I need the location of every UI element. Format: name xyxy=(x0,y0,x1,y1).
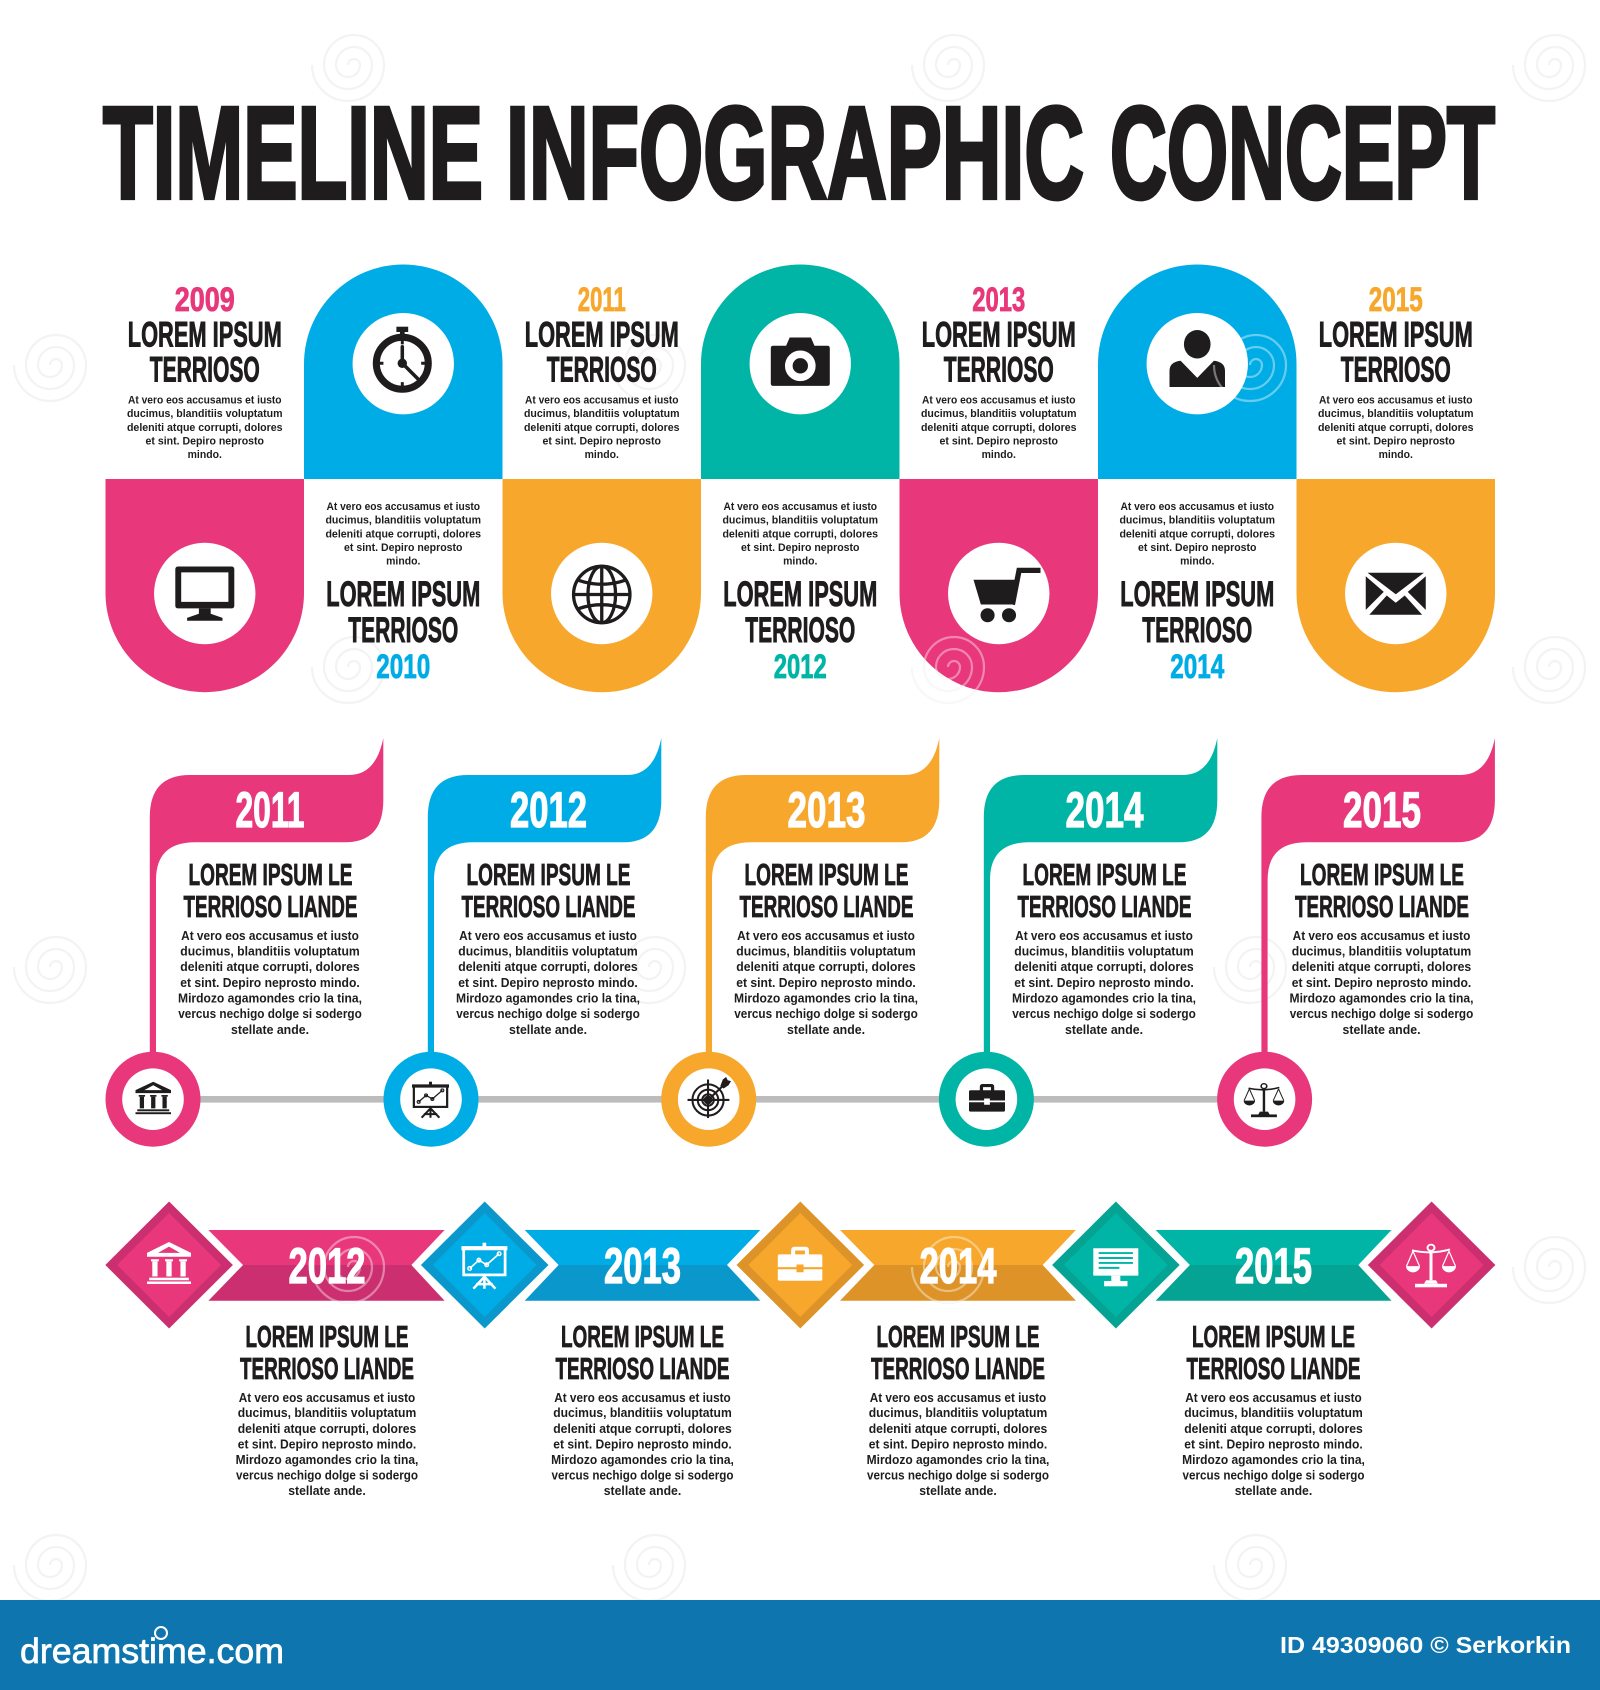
text 2011: et sint. Depiro neprosto xyxy=(543,436,661,448)
text block 2013: vercus nechigo dolge si sodergo xyxy=(552,1468,734,1482)
ribbon 2014 xyxy=(840,1230,1076,1301)
text 2010: ducimus, blanditiis voluptatum xyxy=(325,515,481,527)
ribbon 2013: 2013 xyxy=(604,1238,681,1294)
pill 2012 teal xyxy=(701,264,900,479)
ribbon 2015 xyxy=(1156,1230,1392,1301)
flag 2014: deleniti atque corrupti, dolores xyxy=(1014,959,1194,974)
panel: alternating pill timeline xyxy=(106,264,1495,692)
flag 2011: Mirdozo agamondes crio la tina, xyxy=(178,990,362,1006)
text 2012: et sint. Depiro neprosto xyxy=(741,542,860,554)
flag 2013: stellate ande. xyxy=(787,1022,865,1037)
text 2009: deleniti atque corrupti, dolores xyxy=(127,422,283,434)
flag 2012: ducimus, blanditiis voluptatum xyxy=(458,944,638,958)
text 2013: LOREM IPSUM xyxy=(922,316,1076,354)
text block 2015: LOREM IPSUM LE xyxy=(1192,1319,1355,1354)
text 2009: ducimus, blanditiis voluptatum xyxy=(127,408,283,420)
flag 2013 xyxy=(661,738,939,1147)
ribbon 2015: 2015 xyxy=(1235,1238,1312,1294)
flag 2015: deleniti atque corrupti, dolores xyxy=(1292,959,1471,974)
panel: flag timeline xyxy=(106,738,1495,1147)
text block 2013: At vero eos accusamus et iusto xyxy=(554,1390,731,1405)
pill 2013 pink xyxy=(900,479,1098,692)
text 2011: 2011 xyxy=(578,281,626,319)
connector line xyxy=(195,1096,1225,1103)
text 2013: At vero eos accusamus et iusto xyxy=(922,394,1076,406)
pill 2014 blue xyxy=(1098,264,1296,479)
flag 2014: LOREM IPSUM LE xyxy=(1022,857,1186,892)
text block 2012: ducimus, blanditiis voluptatum xyxy=(238,1405,416,1420)
text 2014: At vero eos accusamus et iusto xyxy=(1120,501,1274,513)
flag 2011: TERRIOSO LIANDE xyxy=(184,889,358,924)
text 2012: ducimus, blanditiis voluptatum xyxy=(722,515,878,527)
text 2015: deleniti atque corrupti, dolores xyxy=(1318,422,1474,434)
text block 2012: et sint. Depiro neprosto mindo. xyxy=(238,1436,416,1452)
text 2014: LOREM IPSUM xyxy=(1120,575,1274,614)
text block 2012: vercus nechigo dolge si sodergo xyxy=(236,1468,418,1482)
text 2011: LOREM IPSUM xyxy=(525,316,679,354)
text 2011: TERRIOSO xyxy=(547,350,657,390)
text 2013: et sint. Depiro neprosto xyxy=(940,436,1058,448)
flag 2013: LOREM IPSUM LE xyxy=(744,857,908,892)
text block 2014 xyxy=(867,1319,1049,1498)
text 2015: et sint. Depiro neprosto xyxy=(1337,436,1455,448)
text 2009: 2009 xyxy=(175,281,235,319)
flag 2011: LOREM IPSUM LE xyxy=(188,857,352,892)
pill 2015 orange xyxy=(1296,479,1495,692)
flag 2013: ducimus, blanditiis voluptatum xyxy=(736,944,916,958)
text block 2013: Mirdozo agamondes crio la tina, xyxy=(551,1452,734,1467)
text block 2013: stellate ande. xyxy=(604,1483,681,1498)
flag 2015: LOREM IPSUM LE xyxy=(1300,857,1464,892)
flag 2015 xyxy=(1217,738,1495,1147)
text block 2012: TERRIOSO LIANDE xyxy=(240,1351,414,1386)
text 2014: TERRIOSO xyxy=(1142,611,1252,650)
text block 2014: At vero eos accusamus et iusto xyxy=(870,1390,1046,1405)
flag 2015: Mirdozo agamondes crio la tina, xyxy=(1290,990,1474,1006)
flag 2014: TERRIOSO LIANDE xyxy=(1018,889,1192,924)
text block 2014: vercus nechigo dolge si sodergo xyxy=(867,1468,1049,1482)
flag 2011 xyxy=(106,738,383,1147)
flag 2014: stellate ande. xyxy=(1065,1022,1143,1037)
flag 2014 xyxy=(939,738,1217,1147)
text block 2015: Mirdozo agamondes crio la tina, xyxy=(1182,1452,1365,1467)
text 2010: TERRIOSO xyxy=(348,611,458,650)
text block 2015: stellate ande. xyxy=(1235,1483,1312,1498)
flag 2011: 2011 xyxy=(236,782,304,838)
text 2012 xyxy=(722,501,878,686)
text 2010: deleniti atque corrupti, dolores xyxy=(325,528,481,540)
flag 2013: TERRIOSO LIANDE xyxy=(740,889,914,924)
flag 2014: ducimus, blanditiis voluptatum xyxy=(1014,944,1194,958)
diamond: briefcase xyxy=(736,1202,864,1328)
text block 2014: TERRIOSO LIANDE xyxy=(871,1351,1045,1386)
text 2012: At vero eos accusamus et iusto xyxy=(723,501,877,513)
footer bar xyxy=(0,1600,1600,1690)
text 2014: deleniti atque corrupti, dolores xyxy=(1119,528,1275,540)
flag 2013: vercus nechigo dolge si sodergo xyxy=(734,1006,918,1021)
text 2014: et sint. Depiro neprosto xyxy=(1138,542,1257,554)
text block 2015: At vero eos accusamus et iusto xyxy=(1185,1390,1362,1405)
flag 2012: deleniti atque corrupti, dolores xyxy=(458,959,638,974)
text 2015: At vero eos accusamus et iusto xyxy=(1319,394,1473,406)
text 2013: 2013 xyxy=(972,281,1025,319)
text 2011: At vero eos accusamus et iusto xyxy=(525,394,679,406)
foreground watermark spirals xyxy=(312,335,1286,1303)
text 2011: mindo. xyxy=(585,449,619,461)
text 2012: mindo. xyxy=(783,556,817,568)
text 2013: ducimus, blanditiis voluptatum xyxy=(921,408,1077,420)
diamond: scales xyxy=(1368,1202,1495,1328)
pill 2010 blue xyxy=(304,264,502,479)
flag 2012: et sint. Depiro neprosto mindo. xyxy=(458,975,638,990)
text block 2014: Mirdozo agamondes crio la tina, xyxy=(867,1452,1049,1467)
flag 2012: LOREM IPSUM LE xyxy=(466,857,630,892)
flag 2011: At vero eos accusamus et iusto xyxy=(181,928,359,943)
text 2012: TERRIOSO xyxy=(745,611,855,650)
flag 2011: stellate ande. xyxy=(231,1022,309,1037)
text 2010: mindo. xyxy=(386,556,420,568)
text 2010: At vero eos accusamus et iusto xyxy=(326,501,480,513)
flag 2015: stellate ande. xyxy=(1342,1022,1420,1037)
flag 2015: et sint. Depiro neprosto mindo. xyxy=(1292,975,1471,990)
text block 2014: deleniti atque corrupti, dolores xyxy=(869,1421,1047,1436)
text block 2014: ducimus, blanditiis voluptatum xyxy=(869,1405,1047,1420)
flag 2012 xyxy=(384,738,661,1147)
flag 2014: vercus nechigo dolge si sodergo xyxy=(1012,1006,1196,1021)
flag 2013: Mirdozo agamondes crio la tina, xyxy=(734,990,918,1006)
flag 2012: stellate ande. xyxy=(509,1022,587,1037)
flag 2012: 2012 xyxy=(510,782,587,838)
flag 2012: At vero eos accusamus et iusto xyxy=(459,928,637,943)
text block 2015: vercus nechigo dolge si sodergo xyxy=(1182,1468,1365,1482)
flag 2015: vercus nechigo dolge si sodergo xyxy=(1290,1006,1473,1021)
flag 2011: deleniti atque corrupti, dolores xyxy=(180,959,360,974)
text 2009: et sint. Depiro neprosto xyxy=(146,436,264,448)
text 2012: 2012 xyxy=(774,648,827,686)
flag 2012: Mirdozo agamondes crio la tina, xyxy=(456,990,640,1006)
text 2014: 2014 xyxy=(1170,648,1224,686)
flag 2014: et sint. Depiro neprosto mindo. xyxy=(1014,975,1194,990)
text block 2015: ducimus, blanditiis voluptatum xyxy=(1184,1405,1363,1420)
flag 2015: TERRIOSO LIANDE xyxy=(1295,889,1469,924)
text 2009: LOREM IPSUM xyxy=(128,316,282,354)
text 2015: mindo. xyxy=(1379,449,1413,461)
text block 2015 xyxy=(1182,1319,1365,1498)
text 2013 xyxy=(921,281,1077,461)
diamond: presentation board xyxy=(421,1202,548,1328)
text block 2012: At vero eos accusamus et iusto xyxy=(239,1390,415,1405)
title: INFOGRAPHIC xyxy=(506,79,1084,226)
flag 2014: Mirdozo agamondes crio la tina, xyxy=(1012,990,1196,1006)
text block 2012: Mirdozo agamondes crio la tina, xyxy=(236,1452,418,1467)
text 2013: deleniti atque corrupti, dolores xyxy=(921,422,1077,434)
text block 2014: stellate ande. xyxy=(919,1483,997,1498)
text block 2012: LOREM IPSUM LE xyxy=(246,1319,408,1354)
text block 2012 xyxy=(236,1319,418,1498)
text block 2013: ducimus, blanditiis voluptatum xyxy=(553,1405,732,1420)
flag 2012: TERRIOSO LIANDE xyxy=(462,889,636,924)
text block 2013: deleniti atque corrupti, dolores xyxy=(553,1421,732,1436)
ribbon 2014: 2014 xyxy=(920,1238,997,1294)
footer image id: ID 49309060 © Serkorkin xyxy=(1280,1632,1571,1658)
text 2010: LOREM IPSUM xyxy=(326,575,480,614)
footer logo: dreamstime.com xyxy=(20,1632,284,1671)
text 2010: 2010 xyxy=(376,648,430,686)
text 2012: deleniti atque corrupti, dolores xyxy=(722,528,878,540)
text 2010: et sint. Depiro neprosto xyxy=(344,542,463,554)
flag 2011: vercus nechigo dolge si sodergo xyxy=(178,1006,362,1021)
flag 2015: 2015 xyxy=(1343,782,1421,838)
text 2015 xyxy=(1318,281,1474,461)
diamond: temple xyxy=(105,1202,233,1328)
flag 2015: At vero eos accusamus et iusto xyxy=(1293,928,1471,943)
pill 2011 orange xyxy=(502,479,701,692)
text block 2013 xyxy=(551,1319,734,1498)
text 2011: ducimus, blanditiis voluptatum xyxy=(524,408,680,420)
flag 2014: 2014 xyxy=(1066,782,1144,838)
text 2013: mindo. xyxy=(982,449,1016,461)
flag 2012: vercus nechigo dolge si sodergo xyxy=(456,1006,640,1021)
text block 2015: deleniti atque corrupti, dolores xyxy=(1184,1421,1363,1436)
text 2015: 2015 xyxy=(1369,281,1423,319)
text 2014: ducimus, blanditiis voluptatum xyxy=(1119,515,1275,527)
text 2010 xyxy=(325,501,481,686)
text 2013: TERRIOSO xyxy=(944,350,1054,390)
flag 2011: ducimus, blanditiis voluptatum xyxy=(180,944,360,958)
pill 2009 pink xyxy=(106,479,304,692)
flag 2013: At vero eos accusamus et iusto xyxy=(737,928,915,943)
text 2011 xyxy=(524,281,680,461)
text block 2014: et sint. Depiro neprosto mindo. xyxy=(869,1436,1047,1452)
ribbon 2012: 2012 xyxy=(288,1238,366,1294)
ribbon 2013 xyxy=(525,1230,760,1301)
text 2015: LOREM IPSUM xyxy=(1319,316,1473,354)
text 2009: At vero eos accusamus et iusto xyxy=(128,394,282,406)
text block 2013: et sint. Depiro neprosto mindo. xyxy=(553,1436,732,1452)
text block 2012: deleniti atque corrupti, dolores xyxy=(238,1421,416,1436)
text 2015: TERRIOSO xyxy=(1341,350,1451,390)
title xyxy=(103,79,1495,226)
text block 2015: et sint. Depiro neprosto mindo. xyxy=(1184,1436,1363,1452)
text 2009: TERRIOSO xyxy=(150,350,260,390)
text 2014 xyxy=(1119,501,1275,686)
panel: diamond and ribbon timeline xyxy=(105,1202,1495,1498)
text 2009: mindo. xyxy=(188,449,222,461)
flag 2013: deleniti atque corrupti, dolores xyxy=(736,959,916,974)
text block 2015: TERRIOSO LIANDE xyxy=(1186,1351,1360,1386)
text 2014: mindo. xyxy=(1180,556,1214,568)
ribbon 2012 xyxy=(208,1230,445,1301)
flag 2011: et sint. Depiro neprosto mindo. xyxy=(180,975,360,990)
text 2015: ducimus, blanditiis voluptatum xyxy=(1318,408,1474,420)
text block 2014: LOREM IPSUM LE xyxy=(876,1319,1040,1354)
text block 2013: LOREM IPSUM LE xyxy=(561,1319,724,1354)
text 2012: LOREM IPSUM xyxy=(723,575,877,614)
flag 2013: et sint. Depiro neprosto mindo. xyxy=(736,975,916,990)
text block 2012: stellate ande. xyxy=(288,1483,366,1498)
title: TIMELINE xyxy=(103,79,483,226)
flag 2014: At vero eos accusamus et iusto xyxy=(1015,928,1193,943)
flag 2013: 2013 xyxy=(788,782,866,838)
diamond: screen xyxy=(1052,1202,1180,1328)
text block 2013: TERRIOSO LIANDE xyxy=(556,1351,730,1386)
text 2011: deleniti atque corrupti, dolores xyxy=(524,422,680,434)
flag 2015: ducimus, blanditiis voluptatum xyxy=(1292,944,1471,958)
text 2009 xyxy=(127,281,283,461)
